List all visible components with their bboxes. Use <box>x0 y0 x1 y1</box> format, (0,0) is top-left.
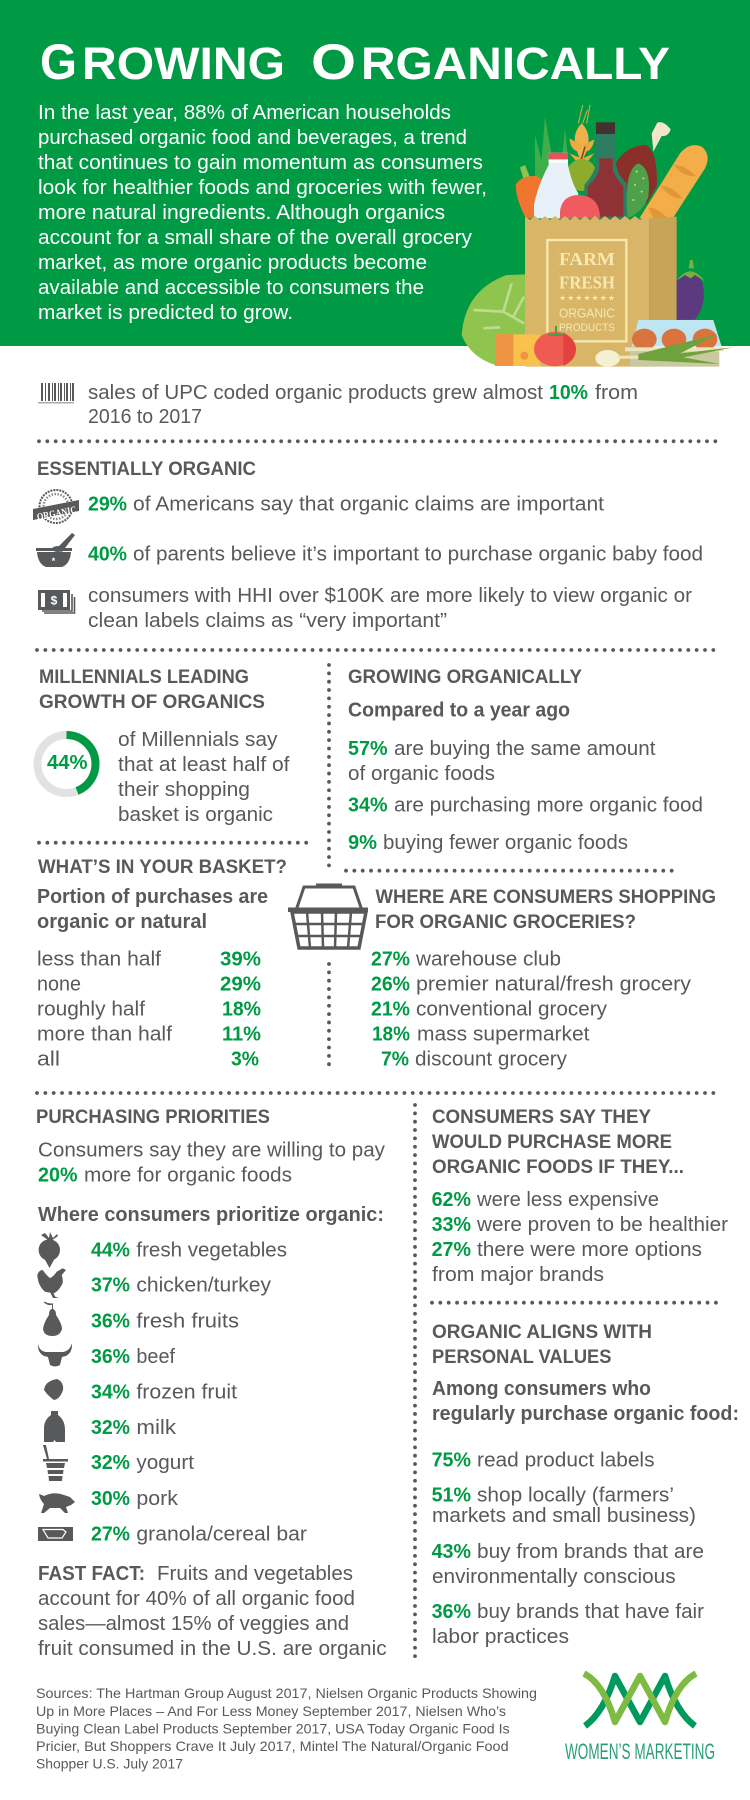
text: UPC sales stat <box>88 382 638 428</box>
list: store types: 7% <box>381 1049 409 1071</box>
subheading: among consumers <box>432 1378 739 1425</box>
stat: fair labor <box>432 1601 704 1648</box>
chart: 44 percent donut: 44% <box>47 752 88 774</box>
panel: what's in your basket <box>37 856 287 1071</box>
stat: 34 percent: 34% <box>348 795 388 817</box>
stat: high income consumers: clean labels claims as “very important” <box>88 610 447 632</box>
heading: where are consumers shopping <box>375 886 716 933</box>
logo: women's marketing <box>565 1674 715 1764</box>
list: store types: warehouse club <box>415 949 561 971</box>
stat: granola bar: granola/cereal bar <box>136 1524 307 1546</box>
table: basket portions: 18% <box>222 999 261 1021</box>
text: sources: Buying Clean Label Products September 2017, USA Today Organic Food Is <box>36 1720 510 1736</box>
text: sources: Up in More Places – And For Less Money September 2017, Nielsen Who’s <box>36 1703 506 1719</box>
panel: green header <box>0 0 750 346</box>
stat: beef: beef <box>136 1346 175 1368</box>
table: basket portions: all <box>37 1049 60 1071</box>
icon: granola bar <box>38 1527 73 1541</box>
stat: environmentally conscious: buy from brands that are <box>477 1541 704 1563</box>
table: basket portions: less than half <box>37 949 161 971</box>
stat: fair labor: labor practices <box>432 1626 569 1648</box>
subheading: among consumers: regularly purchase organic food: <box>432 1403 739 1425</box>
stat: frozen fruit: 34% <box>91 1381 130 1403</box>
subheading: among consumers: Among consumers who <box>432 1378 651 1400</box>
stat: beef: 36% <box>91 1346 130 1368</box>
subheading: portion of purchases: Portion of purchases are <box>37 886 268 908</box>
list: reasons: 33% <box>432 1214 471 1236</box>
stat: shop locally: shop locally (farmers’ <box>477 1485 674 1507</box>
heading: millennials leading growth: GROWTH OF ORGANICS <box>39 691 265 713</box>
icon: grocery bag illustration <box>462 105 733 367</box>
intro paragraph: available and accessible to consumers the <box>38 277 424 299</box>
icon: mortar and spoon <box>36 533 75 567</box>
icon: yogurt cup <box>43 1445 68 1481</box>
intro paragraph: In the last year, 88% of American households <box>38 102 451 124</box>
icon: money stack: $ <box>51 594 58 608</box>
stat: milk <box>91 1417 177 1439</box>
stat: environmentally conscious <box>432 1541 704 1588</box>
stat: 40 percent: of parents believe it’s important to purchase organic baby food <box>133 544 703 566</box>
text: millennials stat: their shopping <box>118 779 250 801</box>
stat: 40 percent: 40% <box>88 544 127 566</box>
list: reasons <box>432 1189 728 1286</box>
heading: consumers say they: ORGANIC FOODS IF THEY... <box>432 1156 684 1178</box>
heading: purchasing priorities: PURCHASING PRIORITIES <box>36 1106 270 1128</box>
stat: frozen fruit: frozen fruit <box>136 1381 237 1403</box>
icon: money stack <box>40 592 74 613</box>
title: ROWING <box>82 38 285 89</box>
heading: where are consumers shopping: FOR ORGANIC GROCERIES? <box>375 911 636 933</box>
icon: barcode <box>38 383 74 404</box>
panel: where consumers shop <box>371 886 716 1071</box>
text: sources <box>36 1685 537 1772</box>
stat: 29 percent: of Americans say that organic claims are important <box>133 494 604 516</box>
subheading: portion of purchases <box>37 886 268 933</box>
list: store types: 27% <box>371 949 410 971</box>
intro paragraph: that continues to gain momentum as consumers <box>38 152 483 174</box>
icon: chicken <box>37 1268 66 1298</box>
subheading: portion of purchases: organic or natural <box>37 911 207 933</box>
heading: millennials leading growth: MILLENNIALS LEADING <box>39 666 249 688</box>
stat: 57 percent: 57% <box>348 738 388 760</box>
list: reasons: were proven to be healthier <box>476 1214 728 1236</box>
icon: raspberry <box>44 1379 63 1400</box>
intro paragraph: more natural ingredients. Although organics <box>38 202 445 224</box>
icon: milk jug <box>44 1411 65 1442</box>
stat: fresh fruits: 36% <box>91 1310 130 1332</box>
stat: 57 percent <box>348 738 656 785</box>
heading: growing organically: GROWING ORGANICALLY <box>348 666 582 688</box>
text: millennials stat: that at least half of <box>118 754 290 776</box>
stat: granola bar: 27% <box>91 1524 130 1546</box>
callout: fast fact: fruit consumed in the U.S. are organic <box>38 1638 387 1660</box>
heading: organic aligns with personal values: PERSONAL VALUES <box>432 1346 612 1368</box>
bag label text: ORGANIC <box>559 306 615 320</box>
icon: shopping basket <box>288 884 368 948</box>
stat: pork: 30% <box>91 1488 130 1510</box>
text: UPC sales stat: sales of UPC coded organic products grew almost <box>88 382 543 404</box>
text: willing to pay: more for organic foods <box>84 1165 292 1187</box>
table: basket portions: more than half <box>37 1024 172 1046</box>
table: basket portions: roughly half <box>37 999 145 1021</box>
text: UPC sales stat: from <box>595 382 638 404</box>
intro paragraph: market, as more organic products become <box>38 252 427 274</box>
stat: beef <box>91 1346 175 1368</box>
intro paragraph <box>38 102 487 324</box>
stat: milk: milk <box>136 1417 177 1439</box>
title <box>40 34 670 90</box>
heading: consumers say they: WOULD PURCHASE MORE <box>432 1131 672 1153</box>
stat: frozen fruit <box>91 1381 237 1403</box>
list: store types <box>371 949 691 1071</box>
stat: 57 percent: are buying the same amount <box>394 738 656 760</box>
callout: fast fact: Fruits and vegetables <box>157 1563 353 1585</box>
intro paragraph: purchased organic food and beverages, a trend <box>38 127 467 149</box>
stat: 9 percent: 9% <box>348 832 377 854</box>
icon: organic stamp: ORGANIC <box>36 505 77 523</box>
text: millennials stat: of Millennials say <box>118 729 278 751</box>
bag label text: PRODUCTS <box>559 322 615 334</box>
stat: read labels: read product labels <box>477 1450 654 1472</box>
heading: consumers say they: CONSUMERS SAY THEY <box>432 1106 651 1128</box>
table: basket portions <box>37 949 261 1071</box>
stat: shop locally <box>432 1485 696 1527</box>
bag label text: FRESH <box>559 272 615 292</box>
text: UPC sales stat: 10% <box>549 382 588 404</box>
stat: high income consumers: consumers with HHI over $100K are more likely to view organic or <box>88 585 692 607</box>
text: UPC sales stat: 2016 to 2017 <box>88 406 202 428</box>
stat: yogurt <box>91 1452 194 1474</box>
text: willing to pay: 20% <box>38 1165 78 1187</box>
text: sources: Pricier, But Shoppers Crave It July 2017, Mintel The Natural/Organic Food <box>36 1738 509 1754</box>
list: reasons: were less expensive <box>476 1189 659 1211</box>
stat: 34 percent: are purchasing more organic food <box>394 795 703 817</box>
bag label text: FARM <box>559 249 615 269</box>
text: willing to pay: Consumers say they are willing to pay <box>38 1140 385 1162</box>
heading: essentially organic: ESSENTIALLY ORGANIC <box>37 458 256 480</box>
list: reasons: from major brands <box>432 1264 604 1286</box>
table: basket portions: none <box>37 974 81 996</box>
heading: what's in your basket: WHAT’S IN YOUR BASKET? <box>38 856 287 878</box>
callout: fast fact: account for 40% of all organic food <box>38 1588 355 1610</box>
stat: 57 percent: of organic foods <box>348 763 495 785</box>
panel: growing organically compared to a year ago <box>348 666 703 854</box>
callout: fast fact: sales—almost 15% of veggies and <box>38 1613 349 1635</box>
list: store types: mass supermarket <box>417 1024 590 1046</box>
table: basket portions: 29% <box>220 974 261 996</box>
text: willing to pay <box>38 1140 385 1187</box>
list: store types: 26% <box>371 974 410 996</box>
bag label text: ★★★★★★★ <box>559 294 615 303</box>
panel: would purchase more if <box>432 1106 728 1286</box>
list: reasons: there were more options <box>477 1239 702 1261</box>
stat: fair labor: buy brands that have fair <box>477 1601 704 1623</box>
title: RGANICALLY <box>361 38 670 89</box>
list: reasons: 62% <box>432 1189 471 1211</box>
heading: consumers say they <box>432 1106 684 1178</box>
text: sources: Sources: The Hartman Group August 2017, Nielsen Organic Products Showing <box>36 1685 537 1701</box>
title: G <box>40 34 77 90</box>
icon: pear <box>43 1302 62 1336</box>
panel: millennials <box>38 666 290 826</box>
intro paragraph: look for healthier foods and groceries with fewer, <box>38 177 487 199</box>
table: basket portions: 39% <box>220 949 261 971</box>
stat: chicken: chicken/turkey <box>136 1275 271 1297</box>
text: millennials stat: basket is organic <box>118 804 273 826</box>
list: reasons: 27% <box>432 1239 471 1261</box>
stat: pork: pork <box>136 1488 179 1510</box>
stat: high income consumers <box>88 585 692 632</box>
stat: environmentally conscious: environmentally conscious <box>432 1566 676 1588</box>
stat: environmentally conscious: 43% <box>432 1541 471 1563</box>
icon: pig <box>39 1493 75 1513</box>
heading: where are consumers shopping: WHERE ARE CONSUMERS SHOPPING <box>376 886 716 908</box>
bag label text <box>559 249 615 334</box>
icon: beet <box>39 1232 60 1268</box>
intro paragraph: market is predicted to grow. <box>38 302 293 324</box>
list: store types: conventional grocery <box>416 999 607 1021</box>
stat: fresh vegetables: 44% <box>91 1240 130 1262</box>
stat: 29 percent: 29% <box>88 494 127 516</box>
text: millennials stat <box>118 729 290 826</box>
title: O <box>311 34 356 90</box>
stat: chicken: 37% <box>91 1275 130 1297</box>
stat: fair labor: 36% <box>432 1601 471 1623</box>
icon: organic stamp <box>33 490 79 523</box>
list: store types: 18% <box>372 1024 410 1046</box>
panel: essentially organic <box>33 458 703 632</box>
stat: fresh fruits: fresh fruits <box>136 1310 239 1332</box>
callout: fast fact: FAST FACT: <box>38 1563 145 1585</box>
intro paragraph: account for a small share of the overall grocery <box>38 227 472 249</box>
panel: personal values <box>432 1321 739 1648</box>
stat: milk: 32% <box>91 1417 130 1439</box>
stat: 9 percent: buying fewer organic foods <box>383 832 628 854</box>
stat: yogurt: 32% <box>91 1452 130 1474</box>
stat: read labels: 75% <box>432 1450 471 1472</box>
stat: shop locally: 51% <box>432 1485 471 1507</box>
icon: bull head <box>38 1343 72 1366</box>
table: basket portions: 3% <box>231 1049 259 1071</box>
heading: organic aligns with personal values: ORGANIC ALIGNS WITH <box>432 1321 652 1343</box>
heading: organic aligns with personal values <box>432 1321 652 1368</box>
table: basket portions: 11% <box>222 1024 261 1046</box>
list: store types: discount grocery <box>415 1049 567 1071</box>
icon: mortar and spoon: * <box>52 556 56 566</box>
chart: 44 percent donut <box>38 735 96 793</box>
subheading: compared to a year ago: Compared to a year ago <box>348 700 570 722</box>
text: sources: Shopper U.S. July 2017 <box>36 1756 183 1772</box>
callout: fast fact <box>38 1563 387 1660</box>
stat: yogurt: yogurt <box>136 1452 194 1474</box>
stat: fresh fruits <box>91 1310 239 1332</box>
heading: millennials leading growth <box>39 666 265 713</box>
stat: shop locally: markets and small business) <box>432 1505 696 1527</box>
list: store types: premier natural/fresh grocery <box>416 974 691 996</box>
stat: fresh vegetables: fresh vegetables <box>136 1240 287 1262</box>
subheading: where consumers prioritize: Where consumers prioritize organic: <box>38 1204 384 1226</box>
panel: purchasing priorities <box>36 1106 387 1660</box>
list: store types: 21% <box>371 999 410 1021</box>
stat: pork <box>91 1488 179 1510</box>
